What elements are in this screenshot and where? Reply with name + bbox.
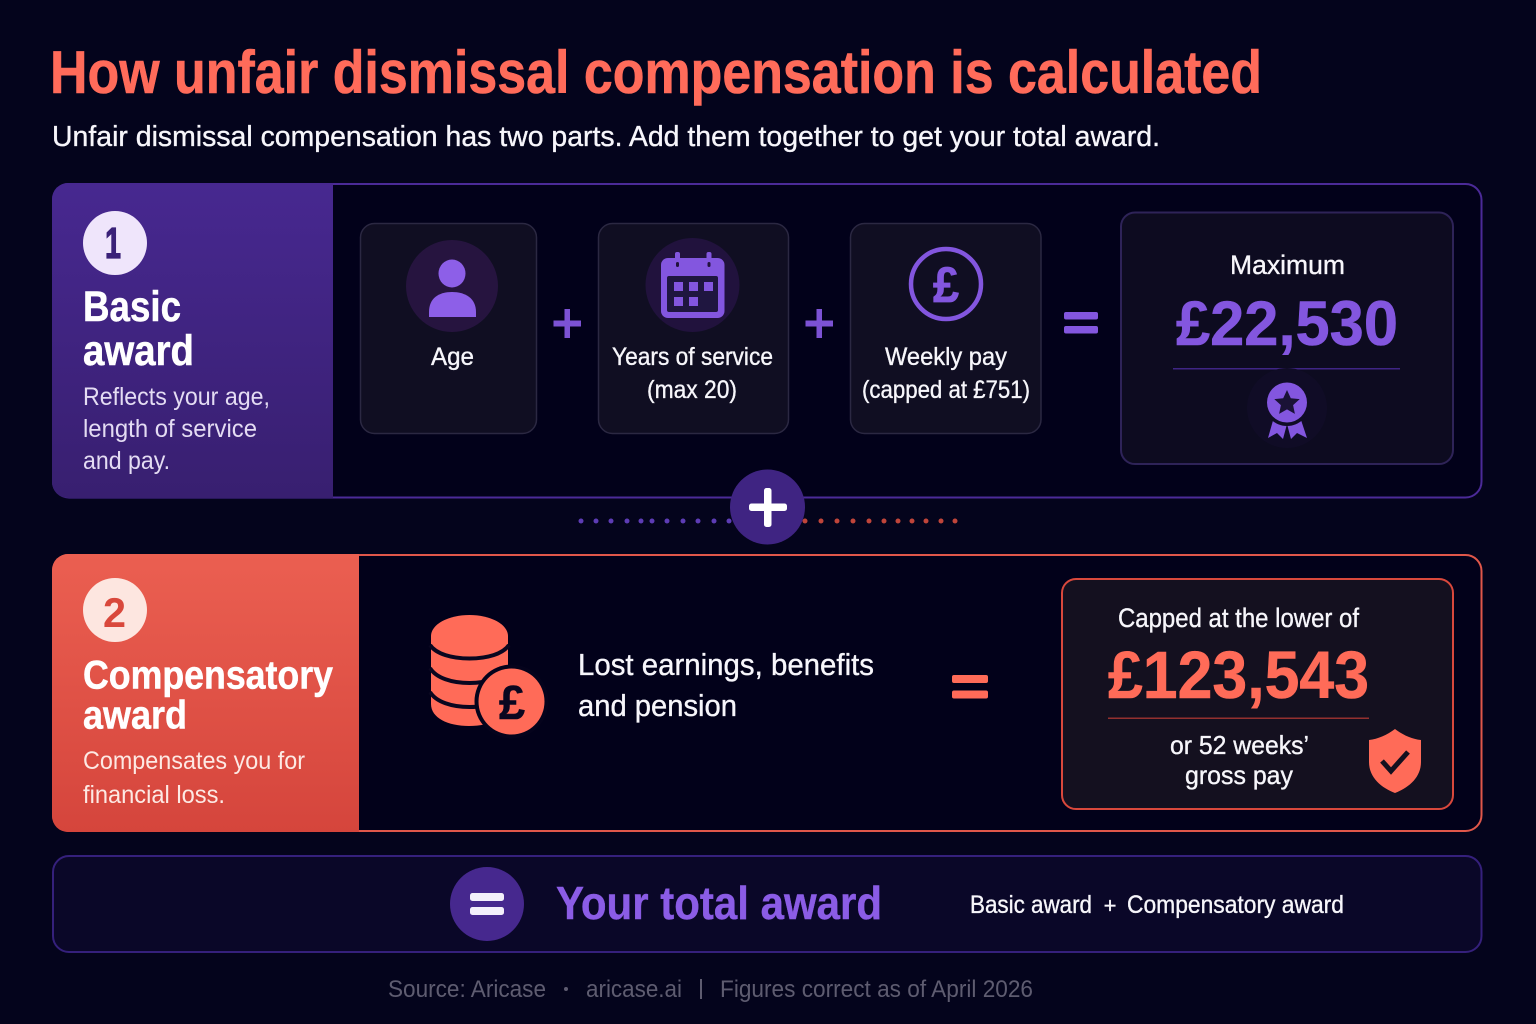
compensatory award heading: Compensatory — [83, 654, 334, 698]
footer source line: aricase.ai — [586, 976, 682, 1003]
label: maximum: Maximum — [1230, 250, 1345, 280]
basic award description: and pay. — [83, 447, 170, 475]
compensatory award description: Compensates you for — [83, 747, 305, 775]
figure: 22,530: £22,530 — [1176, 289, 1398, 359]
label: or 52 weeks gross pay — [1170, 730, 1309, 790]
title: How unfair dismissal compensation is calculated — [50, 39, 1262, 106]
connector: dotted line purple — [578, 518, 732, 524]
compensatory award description: financial loss. — [83, 781, 225, 809]
footer source line: Source: Aricase — [388, 976, 546, 1003]
panel: basic award — [52, 183, 1482, 498]
formula: Basic award — [970, 891, 1092, 919]
connector: dotted line red — [802, 518, 958, 524]
basic award description: Reflects your age, — [83, 383, 270, 411]
basic award heading — [83, 283, 194, 375]
card: age — [360, 224, 536, 434]
basic award header block — [52, 183, 333, 498]
icon: plus connector — [730, 470, 805, 544]
number badge 2: 2 — [103, 589, 126, 636]
compensatory award header block — [52, 554, 359, 832]
card: maximum — [1121, 212, 1453, 464]
label: years of service: Years of service — [612, 343, 773, 371]
label: years of service — [612, 343, 773, 404]
icon: pound coin — [911, 249, 981, 319]
operator: plus — [806, 309, 833, 338]
icon: pound coin: £ — [933, 257, 959, 313]
subtitle: Unfair dismissal compensation has two parts. Add them together to get your total award. — [52, 121, 1160, 153]
figure: 123,543: £123,543 — [1108, 638, 1369, 713]
label: or 52 weeks gross pay: gross pay — [1185, 760, 1293, 790]
operator: equals — [952, 675, 988, 698]
heading: your total award: Your total award — [556, 877, 882, 929]
icon: medal — [1247, 368, 1327, 448]
label: age: Age — [431, 343, 474, 371]
number badge 1 — [83, 211, 147, 275]
card: capped — [1062, 579, 1453, 809]
panel: total award bar — [53, 856, 1482, 952]
label: weekly pay: (capped at £751) — [862, 376, 1030, 404]
number badge 2 — [83, 578, 147, 642]
formula: Compensatory award — [1127, 891, 1344, 919]
basic award description: length of service — [83, 415, 257, 443]
label: or 52 weeks gross pay: or 52 weeks’ — [1170, 730, 1309, 760]
label: years of service: (max 20) — [647, 376, 737, 404]
basic award heading: award — [83, 327, 194, 375]
label: capped at the lower of: Capped at the lower of — [1118, 603, 1359, 633]
icon: shield check — [1369, 729, 1421, 793]
basic award description — [83, 383, 270, 475]
compensatory award heading — [83, 654, 334, 738]
operator: plus — [554, 309, 581, 338]
label: weekly pay: Weekly pay — [885, 343, 1007, 371]
card: years of service — [598, 224, 788, 434]
text: lost earnings — [578, 647, 874, 723]
formula — [970, 891, 1344, 919]
icon: equals circle — [450, 867, 524, 941]
panel: compensatory award — [52, 554, 1482, 832]
compensatory award heading: award — [83, 694, 187, 738]
card: weekly pay — [850, 224, 1041, 434]
icon: person — [406, 240, 498, 332]
icon: coin stack with pound — [430, 615, 548, 738]
basic award heading: Basic — [83, 283, 181, 331]
compensatory award description — [83, 747, 305, 809]
footer source line — [388, 976, 1033, 1003]
footer source line: Figures correct as of April 2026 — [720, 976, 1033, 1003]
text: lost earnings: Lost earnings, benefits — [578, 647, 874, 682]
formula: + — [1104, 893, 1116, 918]
text: lost earnings: and pension — [578, 688, 737, 723]
number badge 1: 1 — [105, 219, 121, 268]
icon: coin stack with pound: £ — [499, 677, 525, 730]
label: weekly pay — [862, 343, 1030, 404]
icon: calendar — [646, 238, 740, 332]
operator: equals — [1064, 312, 1098, 334]
